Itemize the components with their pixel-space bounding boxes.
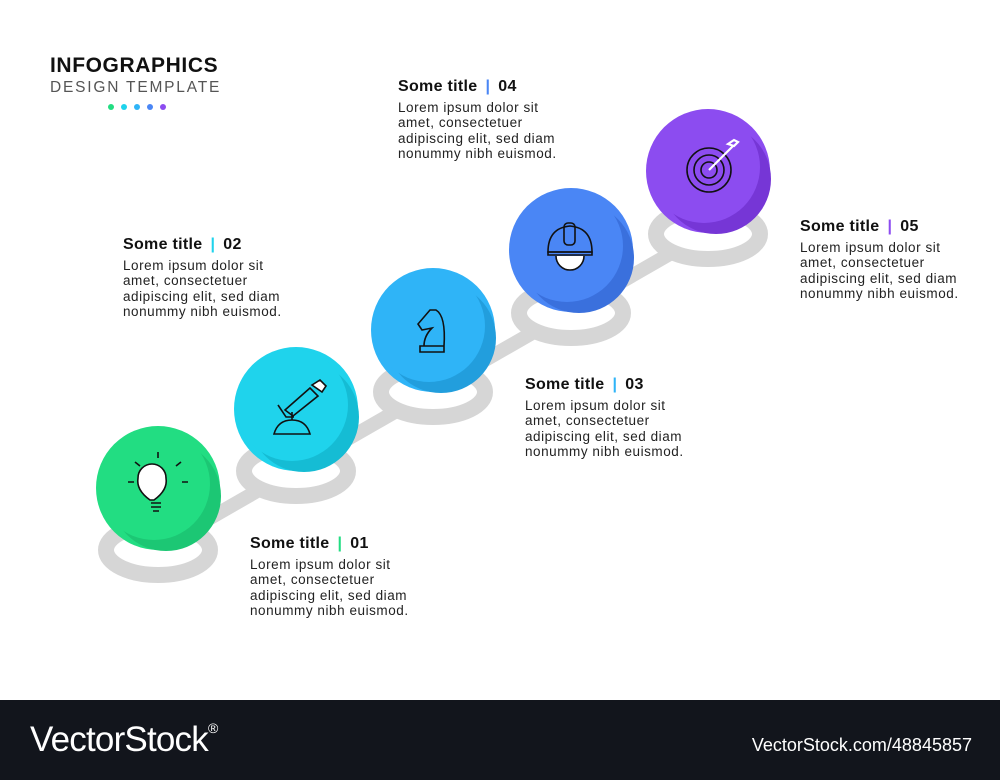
text 04: amet, consectetuer (398, 115, 523, 130)
icon: knight (418, 310, 444, 352)
header title: DESIGN TEMPLATE (50, 79, 221, 96)
footer bar: VectorStock.com/48845857 (752, 735, 972, 755)
step 3 circle (371, 268, 496, 393)
footer bar (0, 700, 1000, 780)
text 01 (250, 535, 409, 618)
dots (108, 104, 166, 110)
icon: microscope (274, 380, 326, 434)
text 05 (800, 218, 959, 301)
header title (50, 54, 221, 110)
text 01: Some title | 01 (250, 535, 369, 552)
text 03: amet, consectetuer (525, 413, 650, 428)
text 05: nonummy nibh euismod. (800, 286, 959, 301)
step 4 circle (509, 188, 634, 313)
text 01: nonummy nibh euismod. (250, 603, 409, 618)
icon: bulb (128, 452, 188, 511)
text 01: Lorem ipsum dolor sit (250, 556, 391, 572)
text 03: Lorem ipsum dolor sit (525, 398, 666, 412)
footer bar: VectorStock® (30, 720, 217, 759)
text 05: amet, consectetuer (800, 255, 925, 270)
icon: helmet gear (548, 223, 592, 270)
text 05: Some title | 05 (800, 218, 919, 235)
text 01: adipiscing elit, sed diam (250, 588, 407, 602)
text 03: Some title | 03 (525, 376, 644, 393)
text 03 (525, 376, 684, 459)
header title: INFOGRAPHICS (50, 54, 218, 77)
text 05: adipiscing elit, sed diam (800, 270, 957, 286)
step 1 circle (96, 426, 221, 551)
text 02: amet, consectetuer (123, 273, 248, 288)
text 03: nonummy nibh euismod. (525, 444, 684, 459)
rings (106, 209, 760, 575)
text 01: amet, consectetuer (250, 572, 375, 587)
text 05: Lorem ipsum dolor sit (800, 240, 941, 254)
text 03: adipiscing elit, sed diam (525, 428, 682, 444)
text 04 (398, 78, 557, 161)
text 04: Some title | 04 (398, 78, 517, 95)
text 02 (123, 236, 282, 319)
text 02: Lorem ipsum dolor sit (123, 258, 264, 272)
icon: target (687, 140, 738, 192)
text 04: adipiscing elit, sed diam (398, 130, 555, 146)
text 04: Lorem ipsum dolor sit (398, 100, 539, 114)
text 02: Some title | 02 (123, 236, 242, 253)
text 04: nonummy nibh euismod. (398, 146, 557, 161)
step 2 circle (234, 347, 359, 472)
connector path (158, 232, 708, 548)
text 02: nonummy nibh euismod. (123, 304, 282, 319)
step 5 circle (646, 109, 771, 234)
text 02: adipiscing elit, sed diam (123, 288, 280, 304)
